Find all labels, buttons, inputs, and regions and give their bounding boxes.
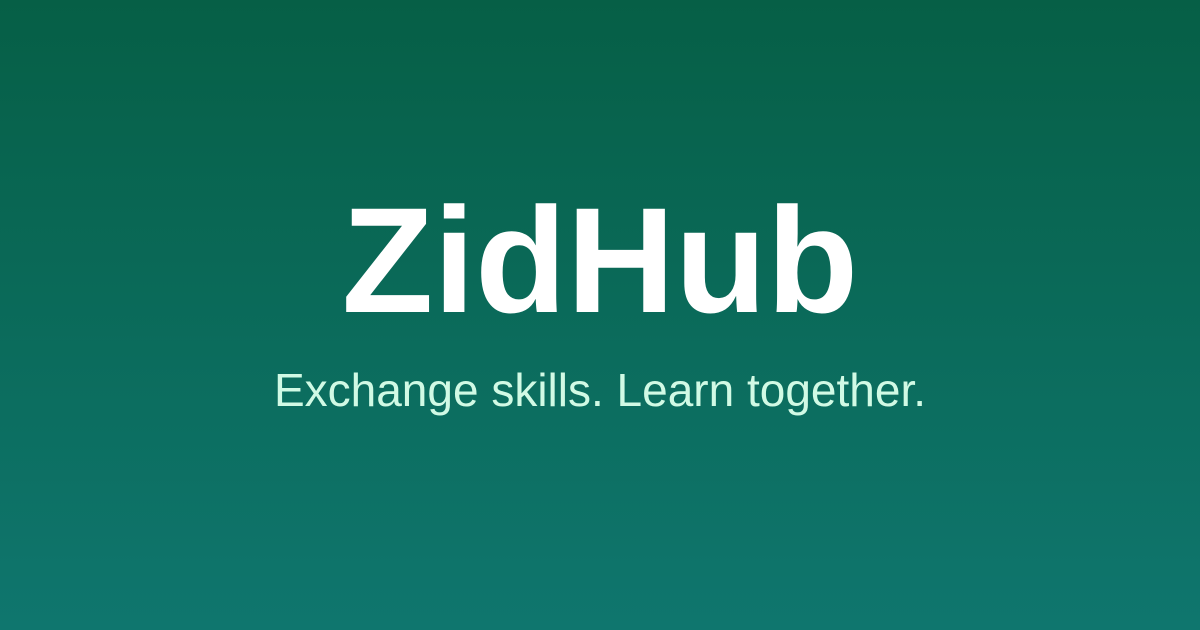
tagline: Exchange skills. Learn together. xyxy=(274,364,926,416)
title: ZidHub xyxy=(342,176,858,344)
